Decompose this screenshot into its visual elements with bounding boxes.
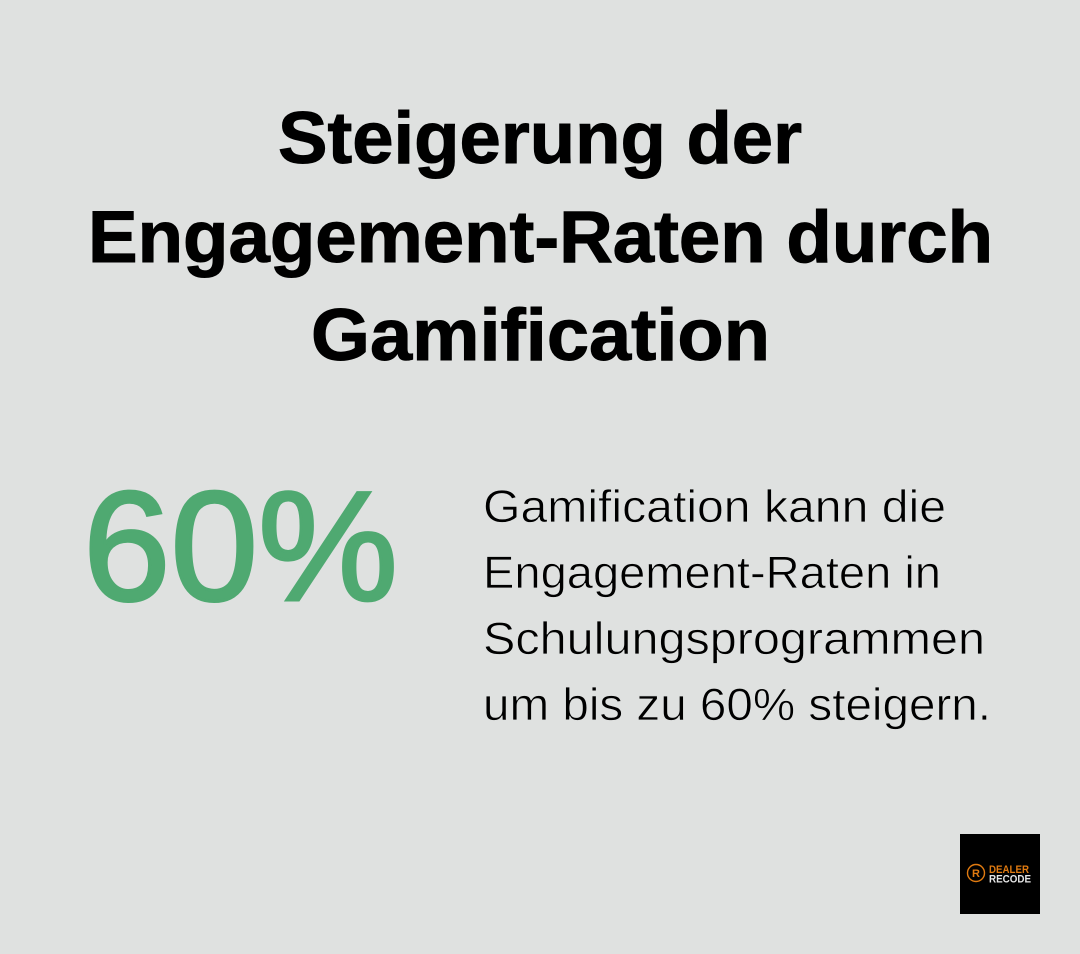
icon: R roundel: R [972, 868, 980, 880]
logo wordmark: DEALER [989, 864, 1029, 876]
description text: Engagement-Raten in [483, 547, 941, 598]
title: Engagement-Raten durch [88, 197, 993, 278]
logo wordmark [989, 864, 1031, 886]
big stat: 60%: 60% [83, 460, 398, 634]
title [88, 98, 993, 376]
title: Gamification [311, 295, 770, 376]
title: Steigerung der [278, 98, 802, 179]
description text [483, 481, 991, 730]
logo: Dealer Recode [960, 834, 1040, 914]
description text: Schulungsprogrammen [483, 613, 985, 664]
logo wordmark: RECODE [989, 874, 1031, 886]
description text: um bis zu 60% steigern. [483, 679, 991, 730]
description text: Gamification kann die [483, 481, 946, 532]
